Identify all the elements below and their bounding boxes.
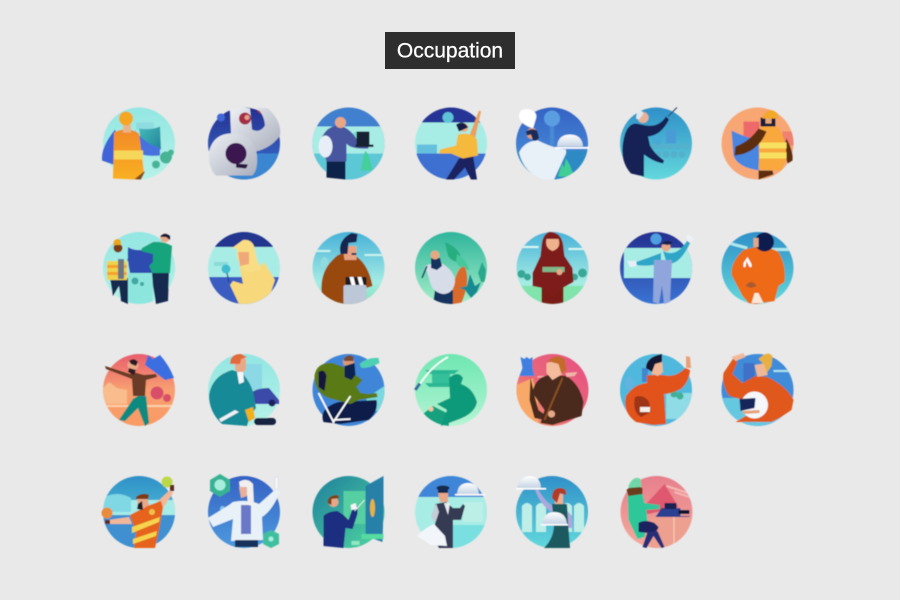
icon: surveyor in hi-vis vest (722, 108, 794, 180)
icon grid (102, 106, 794, 548)
icon: recycling workers with bag (103, 232, 175, 304)
icon: magician with top hat (312, 108, 384, 180)
icon: construction worker with map (102, 108, 175, 180)
icon: traveller with blue flag (103, 354, 175, 426)
icon: monk in red robe (516, 232, 588, 304)
icon: firefighter back view (722, 232, 794, 304)
icon: vault door security (312, 476, 384, 548)
icon: designer on chair (312, 354, 384, 426)
icon: film director with clapperboard (312, 232, 384, 304)
icon: waitress with cloches (516, 476, 588, 548)
icon: racer gesturing (620, 354, 692, 426)
icon: window cleaner in overalls (620, 232, 694, 304)
title (385, 32, 515, 69)
icon: tour guide with strap (516, 354, 588, 426)
icon: astronaut (208, 106, 280, 180)
icon: scientist (208, 474, 280, 548)
icon: waiter with towel (415, 476, 487, 548)
icon: ninja with sword (414, 354, 487, 426)
icon: detective with magnifier (208, 232, 280, 304)
icon: dancer in yellow shirt (415, 108, 487, 180)
icon: gardener with feather plants (415, 232, 487, 304)
title: Occupation (397, 40, 503, 62)
icon: orchestra conductor (620, 108, 692, 180)
icon: racer holding helmet (722, 353, 794, 426)
icon: mechanic with car (208, 354, 280, 426)
icon: traffic controller with paddles (102, 476, 175, 548)
icon: chef with cloche (516, 108, 589, 180)
icon: writer at typewriter (620, 476, 692, 548)
